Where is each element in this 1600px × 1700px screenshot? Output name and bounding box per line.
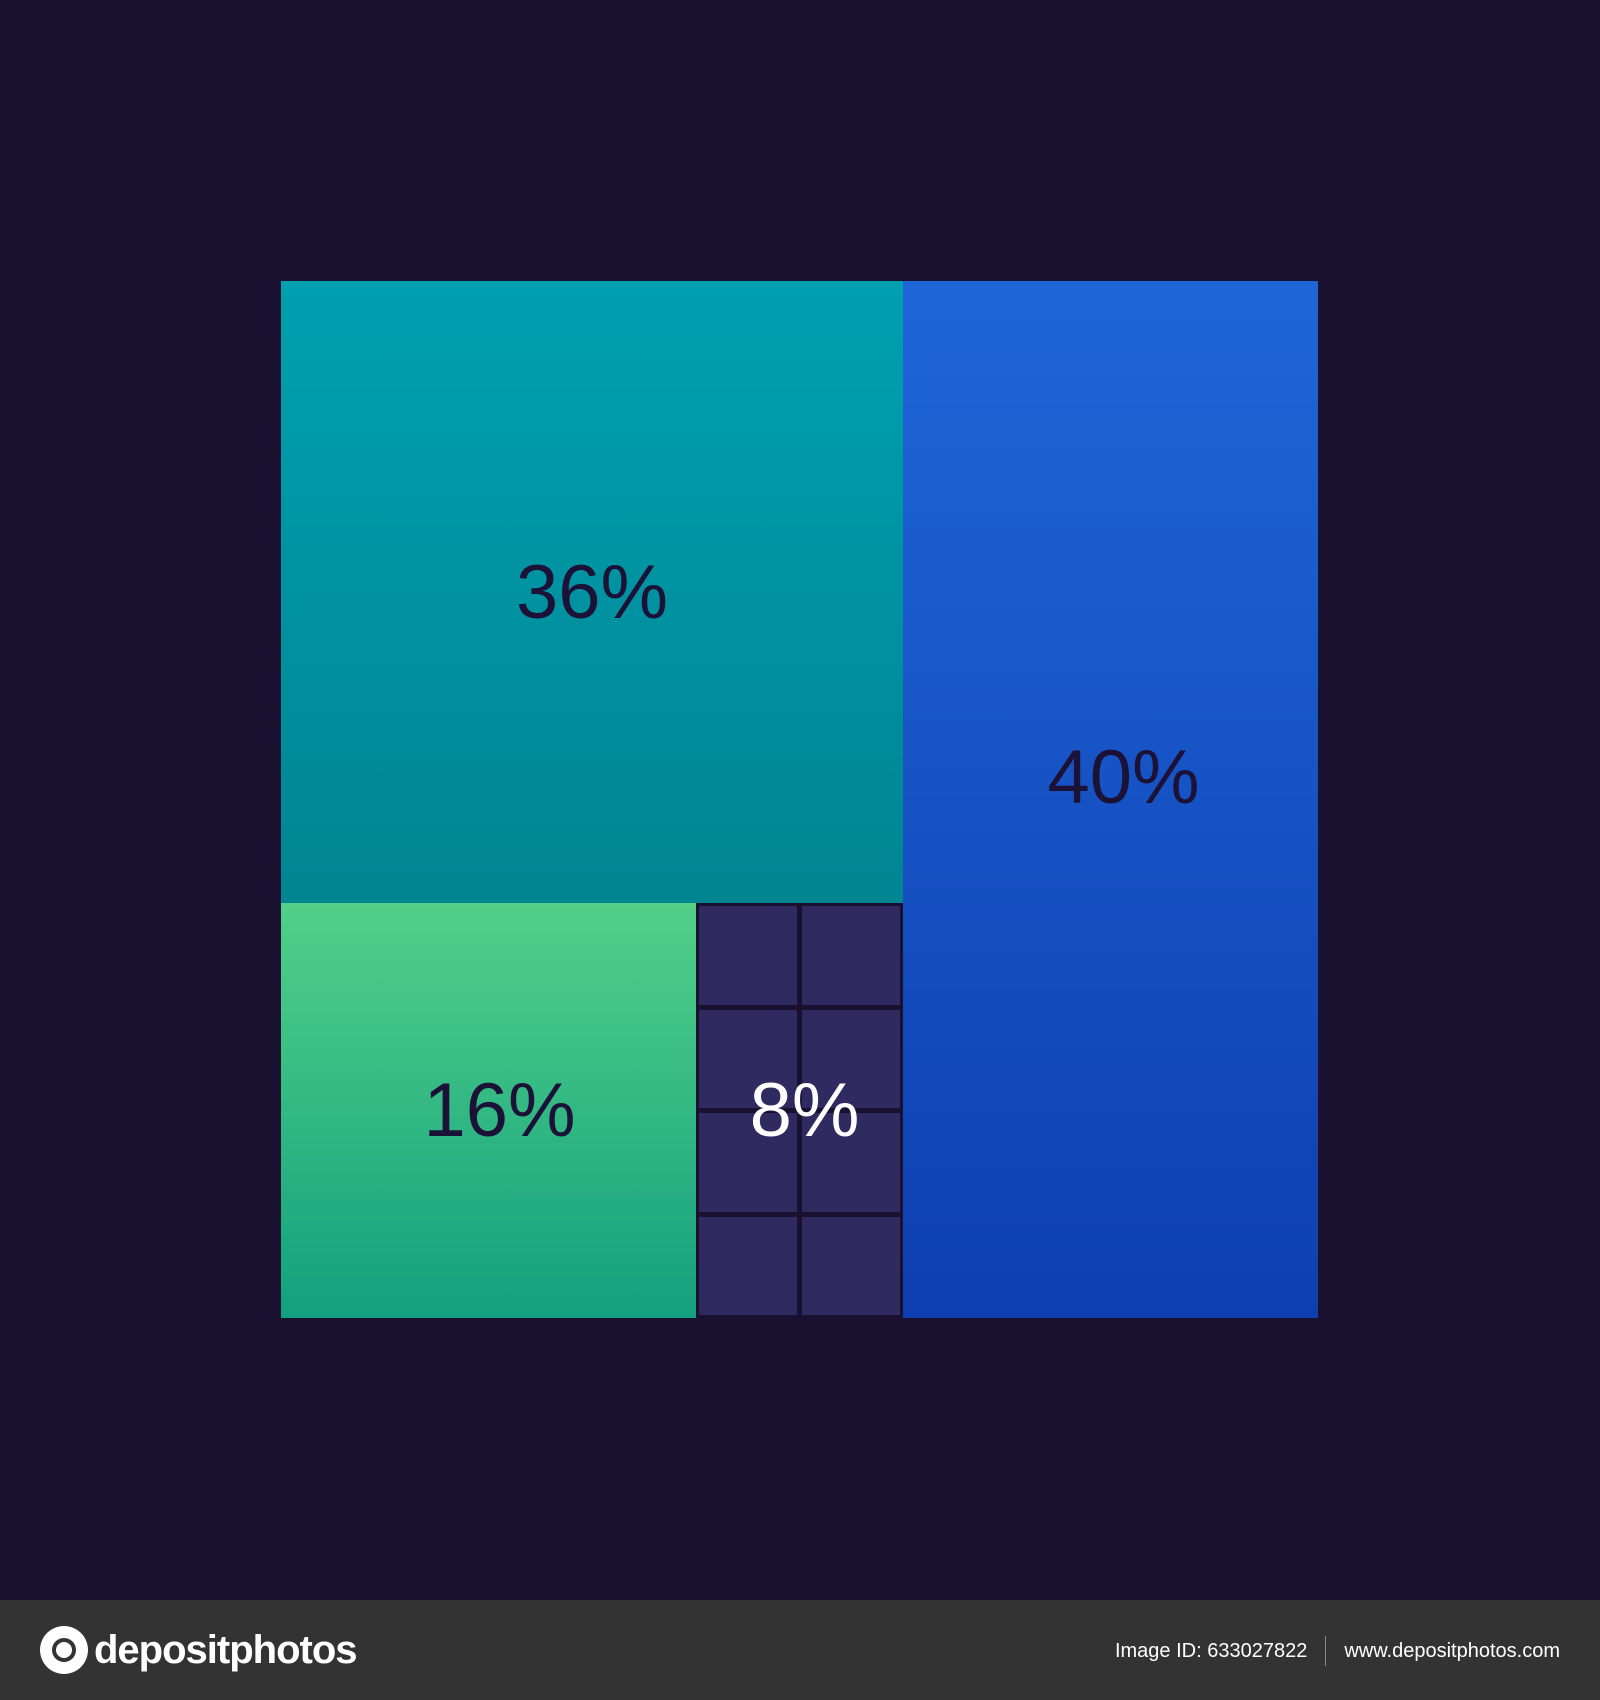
label: 8%: 8% [750, 1068, 859, 1153]
footer info [1115, 1636, 1560, 1666]
block: 36% [281, 281, 903, 903]
treemap chart [281, 281, 1318, 1318]
footer info: Image ID: 633027822 [1115, 1640, 1307, 1662]
block: 16% [281, 903, 696, 1318]
block: 8% grid [696, 903, 903, 1318]
block: 40%: 40% [1047, 735, 1200, 820]
block: 40% [903, 281, 1318, 1318]
footer bar [0, 1600, 1600, 1700]
footer info: www.depositphotos.com [1344, 1640, 1560, 1662]
footer logo: depositphotos [94, 1628, 357, 1672]
block: 36%: 36% [516, 550, 668, 634]
block: 16%: 16% [423, 1068, 576, 1153]
